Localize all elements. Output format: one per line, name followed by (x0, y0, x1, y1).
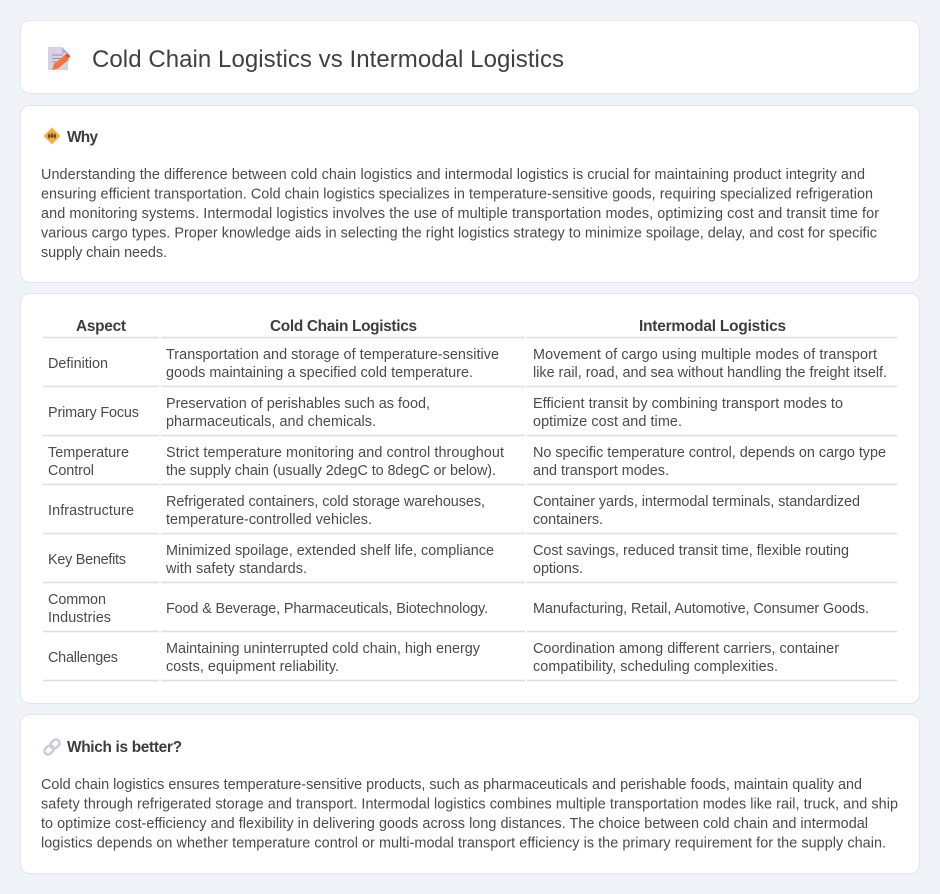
row: key benefits: with safety standards. (165, 561, 307, 577)
row: definition: Movement of cargo using multiple modes of transport (533, 347, 877, 363)
panel: title header (20, 20, 920, 94)
row: primary focus: pharmaceuticals, and chemicals. (166, 414, 376, 430)
row: challenges: costs, equipment reliability. (166, 659, 339, 675)
row: primary focus: Primary Focus (48, 405, 139, 421)
row: primary focus (48, 396, 843, 430)
table header row: Aspect (76, 318, 126, 335)
row: temperature control: the supply chain (usually 2degC to 8degC or below). (166, 463, 496, 479)
why paragraph (41, 167, 879, 261)
row: definition: Definition (48, 356, 108, 372)
row: common industries (48, 592, 869, 626)
row: infrastructure: Container yards, intermodal terminals, standardized (533, 494, 860, 510)
row: temperature control (48, 445, 886, 479)
table header row: Intermodal Logistics (639, 318, 786, 335)
row: infrastructure: temperature-controlled vehicles. (166, 512, 372, 528)
panel: which is better (20, 714, 920, 874)
row: primary focus: Efficient transit by combining transport modes to (533, 396, 843, 412)
row: common industries: Common (48, 592, 106, 608)
row: definition (48, 347, 887, 381)
row: key benefits: Key Benefits (48, 552, 126, 568)
row: primary focus: Preservation of perishables such as food, (166, 396, 430, 412)
table header row: Cold Chain Logistics (270, 318, 417, 335)
title: Cold Chain Logistics vs Intermodal Logistics (92, 46, 564, 73)
row: infrastructure: Infrastructure (48, 503, 134, 519)
row: common industries: Food & Beverage, Pharmaceuticals, Biotechnology. (166, 601, 488, 617)
row: temperature control: No specific temperature control, depends on cargo type (533, 445, 886, 461)
which is better paragraph: to optimize cost-efficiency and flexibility in delivering goods across long distances. The choice between cold chain and intermodal (41, 816, 868, 832)
row: primary focus: optimize cost and time. (533, 414, 682, 430)
panel: comparison table (20, 294, 920, 704)
row: common industries: Manufacturing, Retail, Automotive, Consumer Goods. (533, 601, 869, 617)
which is better paragraph (41, 777, 898, 852)
why paragraph: ensuring efficient transportation. Cold chain logistics specializes in temperature-sensitive goods, requiring specialized refrigeration (41, 186, 873, 202)
heading: why: Why (67, 129, 98, 146)
row: temperature control: and transport modes. (533, 463, 669, 479)
row: challenges: compatibility, scheduling complexities. (533, 659, 778, 675)
row: common industries: Industries (48, 610, 111, 626)
icon: warning diamond (44, 128, 60, 144)
row: key benefits: Cost savings, reduced transit time, flexible routing (533, 543, 849, 559)
panel: why (20, 106, 920, 282)
row: definition: like rail, road, and sea without handling the freight itself. (533, 365, 887, 381)
row: key benefits: options. (533, 561, 583, 577)
row: temperature control: Control (48, 463, 94, 479)
row: challenges: Coordination among different carriers, container (533, 641, 839, 657)
icon: chain link (43, 738, 61, 756)
why paragraph: supply chain needs. (41, 245, 167, 261)
why paragraph: various cargo types. Proper knowledge aids in selecting the right logistics strategy to minimize spoilage, delay, and cost for specific (41, 226, 877, 242)
which is better paragraph: logistics depends on whether temperature control or multi-modal transport efficiency is the primary requirement for the supply chain. (41, 836, 886, 852)
row: temperature control: Temperature (48, 445, 129, 461)
heading: which is better: Which is better? (67, 739, 182, 756)
why paragraph: Understanding the difference between cold chain logistics and intermodal logistics is crucial for maintaining product integrity and (41, 167, 865, 183)
row: challenges: Maintaining uninterrupted cold chain, high energy (166, 641, 481, 657)
row: infrastructure: Refrigerated containers, cold storage warehouses, (166, 494, 485, 510)
row: temperature control: Strict temperature monitoring and control throughout (166, 445, 504, 461)
row: infrastructure: containers. (533, 512, 603, 528)
row: key benefits: Minimized spoilage, extended shelf life, compliance (166, 543, 494, 559)
row: definition: goods maintaining a specified cold temperature. (166, 365, 473, 381)
row: infrastructure (48, 494, 860, 528)
row: key benefits (48, 543, 849, 577)
row: definition: Transportation and storage of temperature-sensitive (166, 347, 499, 363)
row: challenges (48, 641, 839, 675)
row: challenges: Challenges (48, 650, 118, 666)
which is better paragraph: safety through refrigerated storage and transport. Intermodal logistics combines multiple transportation modes like rail, truck, and ship (41, 796, 898, 812)
icon: memo with pencil (48, 47, 70, 70)
which is better paragraph: Cold chain logistics ensures temperature-sensitive products, such as pharmaceuticals and perishable foods, maintain quality and (41, 777, 862, 793)
table header row (76, 318, 786, 335)
why paragraph: and monitoring systems. Intermodal logistics involves the use of multiple transportation modes, optimizing cost and transit time for (41, 206, 879, 222)
